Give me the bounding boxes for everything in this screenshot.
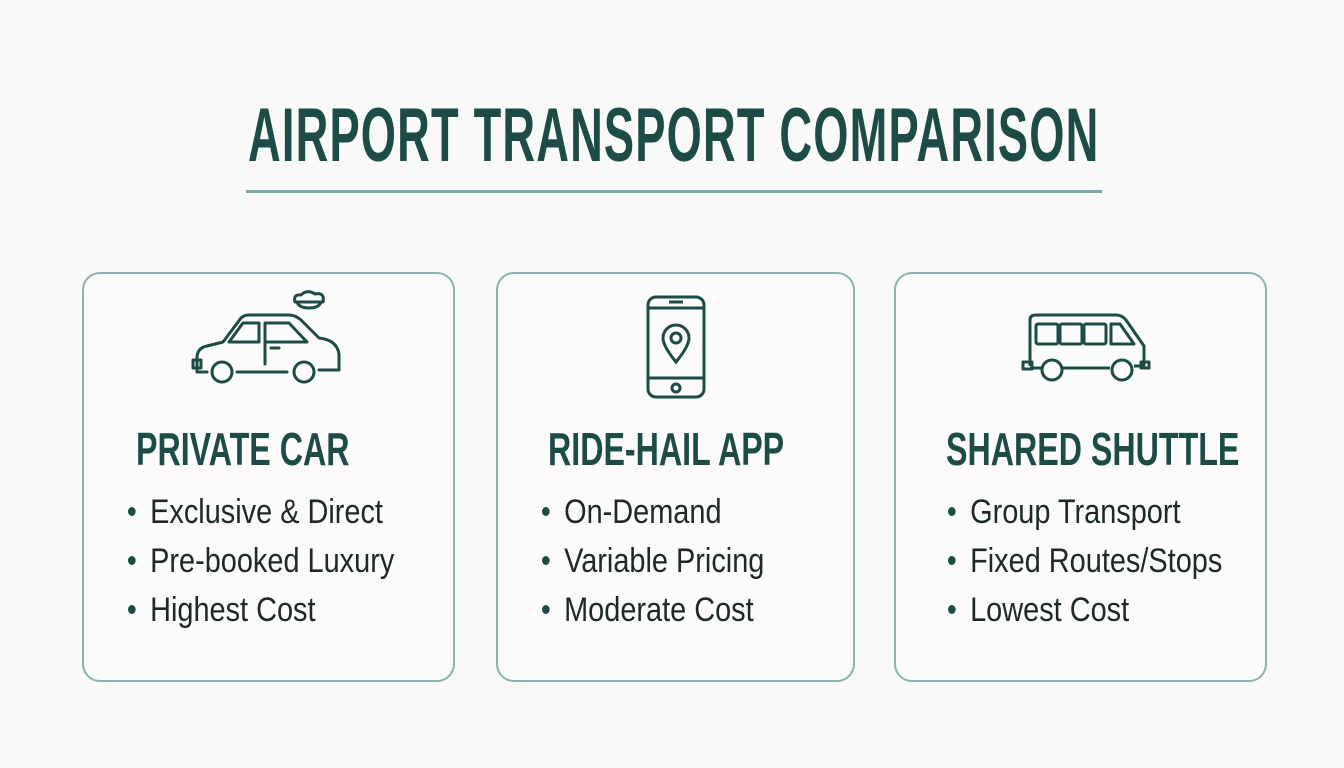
heading: SHARED SHUTTLE bbox=[946, 423, 1239, 475]
bullets: Pre-booked Luxury bbox=[150, 542, 394, 580]
bullets: Fixed Routes/Stops bbox=[970, 542, 1222, 580]
heading: RIDE-HAIL APP bbox=[548, 423, 784, 475]
bullets: On-Demand bbox=[564, 493, 722, 531]
panel: ride-hail app bbox=[496, 272, 855, 682]
bullets: Group Transport bbox=[970, 493, 1181, 531]
bullets: Exclusive & Direct bbox=[150, 493, 383, 531]
icon: van bbox=[1022, 314, 1150, 382]
heading: PRIVATE CAR bbox=[136, 423, 349, 475]
icon: car bbox=[192, 290, 340, 384]
panel: shared shuttle bbox=[894, 272, 1267, 682]
bullets: Variable Pricing bbox=[564, 542, 764, 580]
bullets: Moderate Cost bbox=[564, 591, 754, 629]
bullets bbox=[128, 493, 394, 629]
bullets: Highest Cost bbox=[150, 591, 316, 629]
title: AIRPORT TRANSPORT COMPARISON bbox=[248, 93, 1099, 178]
icon: phone bbox=[646, 296, 706, 398]
bullets bbox=[542, 493, 764, 629]
bullets: Lowest Cost bbox=[970, 591, 1129, 629]
panel: private car bbox=[82, 272, 455, 682]
bullets bbox=[948, 493, 1222, 629]
